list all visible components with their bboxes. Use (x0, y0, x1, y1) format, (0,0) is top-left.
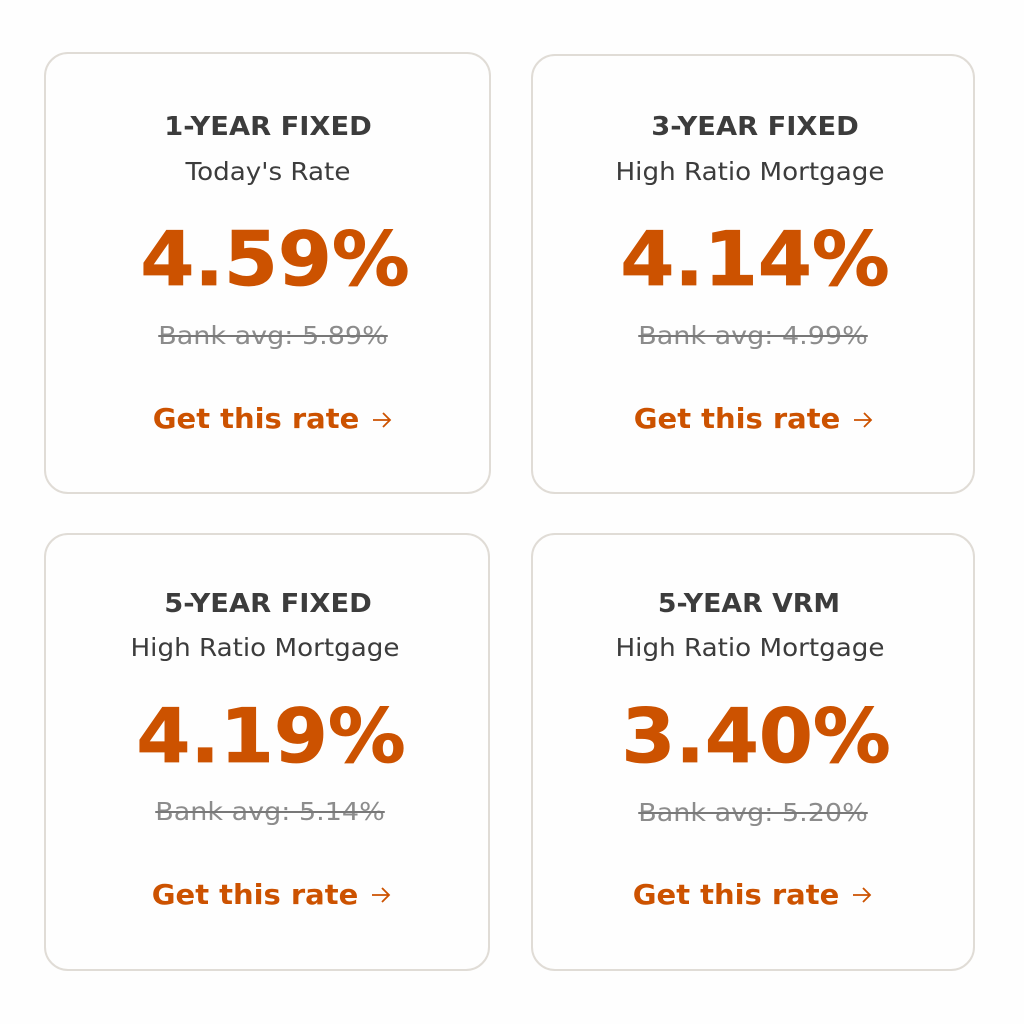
call to action: Get this rate (153, 402, 359, 435)
panel: 1-year fixed (44, 52, 491, 494)
icon: arrow (372, 887, 390, 903)
icon: arrow (373, 412, 392, 428)
subtitle: Today's Rate (186, 157, 350, 186)
panel: 3-year fixed (531, 54, 975, 494)
heading: 1-YEAR FIXED (164, 112, 372, 142)
call to action: Get this rate (633, 878, 839, 911)
subtitle: High Ratio Mortgage (131, 633, 399, 662)
rate: 4.14% (620, 215, 890, 303)
rate: 4.19% (136, 692, 406, 780)
subtitle: High Ratio Mortgage (616, 633, 884, 662)
heading: 5-YEAR FIXED (164, 589, 372, 619)
heading: 5-YEAR VRM (658, 589, 840, 619)
panel: 5-year fixed (44, 533, 490, 971)
call to action: Get this rate (152, 878, 358, 911)
heading: 3-YEAR FIXED (651, 112, 859, 142)
rate: 4.59% (140, 215, 410, 303)
icon: arrow (854, 412, 872, 428)
subtitle: High Ratio Mortgage (616, 157, 884, 186)
bank average: Bank avg: 5.14% (155, 797, 385, 826)
bank average: Bank avg: 5.89% (158, 321, 388, 350)
call to action: Get this rate (634, 402, 840, 435)
panel: 5-year VRM (531, 533, 975, 971)
rate: 3.40% (621, 692, 891, 780)
bank average: Bank avg: 5.20% (638, 798, 868, 827)
icon: arrow (853, 887, 872, 903)
bank average: Bank avg: 4.99% (638, 321, 868, 350)
